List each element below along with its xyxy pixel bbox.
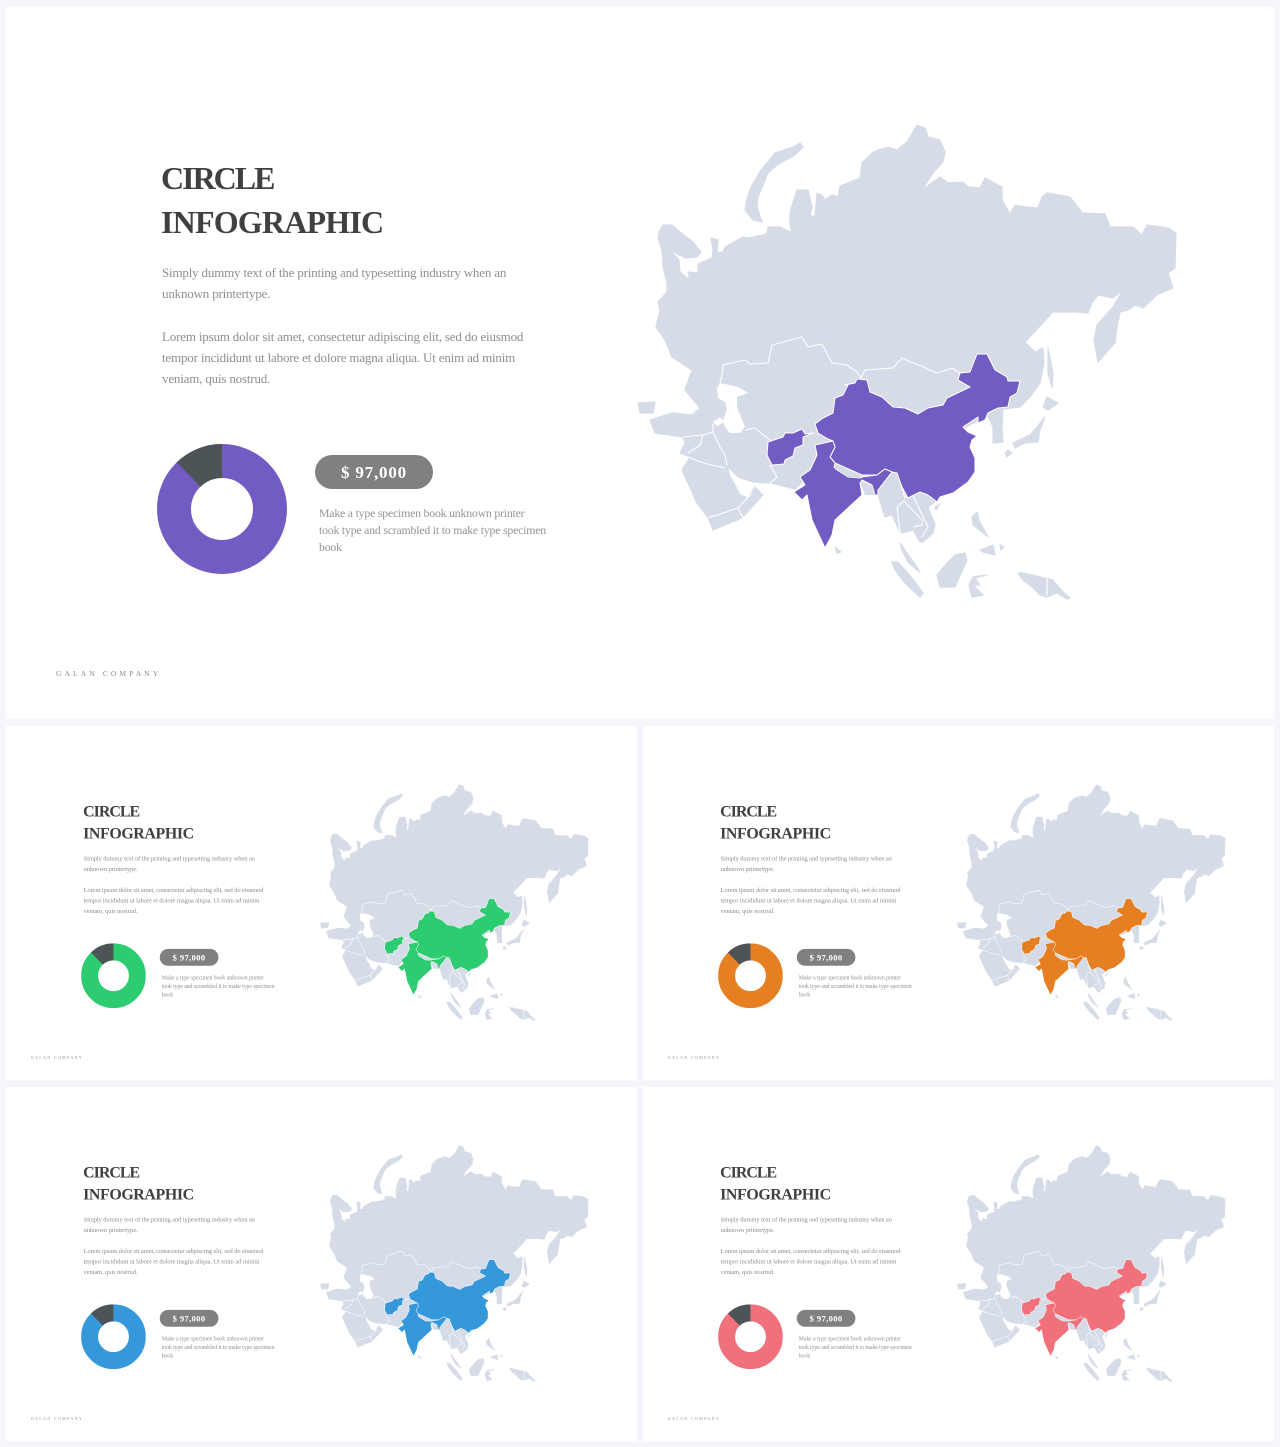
map: Asia with highlighted countries	[638, 124, 1176, 600]
title: CIRCLE	[83, 1163, 139, 1181]
description	[162, 974, 275, 998]
text block: unknown printertype.	[721, 1226, 775, 1233]
description	[162, 1335, 275, 1359]
title: CIRCLE	[720, 1163, 776, 1181]
text block: unknown printertype.	[84, 865, 138, 872]
footer brand: GALAN COMPANY	[31, 1055, 83, 1060]
text block: Simply dummy text of the printing and typesetting industry when an	[84, 1215, 255, 1223]
text block	[162, 265, 524, 386]
text block: Simply dummy text of the printing and typesetting industry when an	[162, 265, 506, 280]
text block	[84, 854, 264, 915]
description: book	[799, 1352, 810, 1359]
text block: Lorem ipsum dolor sit amet, consectetur adipiscing elit, sed do eiusmod	[721, 886, 900, 894]
donut chart	[81, 1304, 146, 1370]
donut chart	[718, 1304, 783, 1369]
text block: unknown printertype.	[84, 1226, 138, 1233]
description	[798, 974, 912, 998]
text block: veniam, quis nostrud.	[721, 1268, 774, 1276]
text block: Lorem ipsum dolor sit amet, consectetur adipiscing elit, sed do eiusmod	[721, 1247, 900, 1255]
text block: veniam, quis nostrud.	[721, 907, 774, 915]
description: Make a type specimen book unknown printer	[799, 1335, 901, 1342]
map: Asia with highlighted countries	[320, 784, 588, 1021]
description: took type and scrambled it to make type specimen	[319, 523, 546, 537]
description: Make a type specimen book unknown printer	[162, 974, 264, 981]
text block: Lorem ipsum dolor sit amet, consectetur adipiscing elit, sed do eiusmod	[84, 1247, 263, 1255]
description: Make a type specimen book unknown printer	[162, 1335, 264, 1342]
value pill: $ 97,000	[341, 463, 407, 482]
text block: Lorem ipsum dolor sit amet, consectetur adipiscing elit, sed do eiusmod	[162, 329, 523, 344]
text block: veniam, quis nostrud.	[84, 1268, 137, 1276]
value pill: $ 97,000	[173, 953, 205, 962]
panel: blue slide	[6, 1087, 637, 1441]
title: INFOGRAPHIC	[83, 1185, 194, 1203]
description: book	[319, 540, 342, 554]
text block: unknown printertype.	[721, 865, 775, 872]
title: INFOGRAPHIC	[720, 1185, 831, 1203]
title: CIRCLE	[83, 802, 139, 820]
title: CIRCLE	[161, 160, 273, 196]
title	[161, 160, 383, 240]
text block	[720, 854, 900, 915]
text block: veniam, quis nostrud.	[162, 371, 270, 386]
text block: veniam, quis nostrud.	[84, 907, 137, 915]
description: took type and scrambled it to make type specimen	[799, 983, 912, 990]
text block: unknown printertype.	[162, 286, 270, 301]
description: Make a type specimen book unknown printer	[799, 974, 901, 981]
description: took type and scrambled it to make type specimen	[799, 1344, 912, 1351]
donut chart	[81, 943, 146, 1008]
text block: tempor incididunt ut labore et dolore magna aliqua. Ut enim ad minim	[84, 1258, 259, 1265]
donut chart	[157, 444, 287, 574]
title	[83, 1163, 194, 1203]
panel: green slide	[6, 726, 637, 1080]
panel: red slide	[643, 1087, 1274, 1441]
title	[720, 1163, 831, 1203]
description: took type and scrambled it to make type specimen	[162, 1344, 275, 1351]
text block	[720, 1215, 900, 1276]
value pill: $ 97,000	[810, 953, 842, 962]
text block: tempor incididunt ut labore et dolore magna aliqua. Ut enim ad minim	[162, 350, 515, 365]
text block: tempor incididunt ut labore et dolore magna aliqua. Ut enim ad minim	[84, 897, 259, 904]
text block: tempor incididunt ut labore et dolore magna aliqua. Ut enim ad minim	[721, 1258, 896, 1265]
description: book	[799, 991, 810, 998]
footer brand: GALAN COMPANY	[31, 1416, 83, 1421]
title: INFOGRAPHIC	[161, 204, 383, 240]
value pill	[160, 949, 218, 966]
title: INFOGRAPHIC	[720, 824, 831, 842]
text block: Simply dummy text of the printing and typesetting industry when an	[721, 1215, 892, 1223]
map: Asia with highlighted countries	[957, 784, 1226, 1021]
description	[798, 1335, 912, 1359]
description	[319, 506, 546, 554]
value pill: $ 97,000	[810, 1314, 842, 1323]
description: took type and scrambled it to make type specimen	[162, 983, 275, 990]
footer brand: GALAN COMPANY	[668, 1416, 720, 1421]
value pill	[797, 949, 855, 966]
footer brand: GALAN COMPANY	[56, 669, 161, 678]
panel: orange slide	[643, 726, 1274, 1080]
value pill	[315, 455, 433, 489]
text block: Lorem ipsum dolor sit amet, consectetur adipiscing elit, sed do eiusmod	[84, 886, 263, 894]
value pill	[160, 1310, 218, 1327]
text block: tempor incididunt ut labore et dolore magna aliqua. Ut enim ad minim	[721, 897, 896, 904]
map: Asia with highlighted countries	[320, 1146, 588, 1382]
description: book	[162, 1352, 173, 1359]
text block	[84, 1215, 264, 1276]
map: Asia with highlighted countries	[957, 1146, 1226, 1382]
value pill: $ 97,000	[173, 1314, 205, 1323]
description: book	[162, 991, 173, 998]
title: CIRCLE	[720, 802, 776, 820]
title	[83, 802, 194, 842]
footer brand: GALAN COMPANY	[668, 1055, 720, 1060]
donut chart	[718, 943, 783, 1008]
panel: main purple slide	[6, 7, 1274, 719]
description: Make a type specimen book unknown printer	[319, 506, 524, 520]
text block: Simply dummy text of the printing and typesetting industry when an	[84, 854, 255, 862]
title: INFOGRAPHIC	[83, 824, 194, 842]
title	[720, 802, 831, 842]
value pill	[797, 1310, 855, 1327]
text block: Simply dummy text of the printing and typesetting industry when an	[721, 854, 892, 862]
